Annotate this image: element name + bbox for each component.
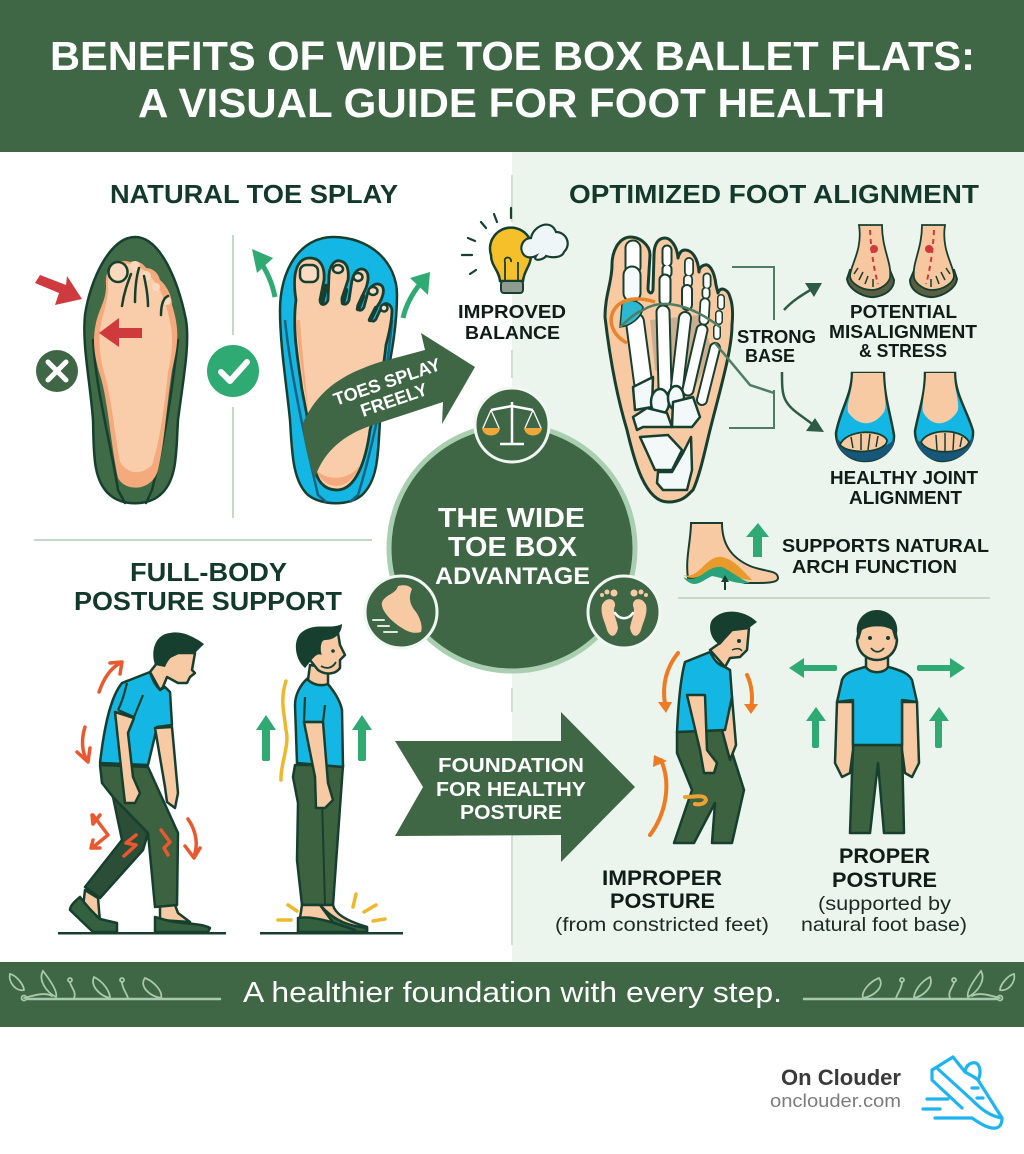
text: strong base: STRONG (737, 326, 816, 347)
text: supports natural arch function: SUPPORTS NATURAL (782, 535, 989, 556)
logo text: On Clouder (781, 1065, 901, 1090)
text: improved balance: BALANCE (465, 322, 560, 343)
icon: happy feet (588, 576, 660, 648)
figure: upright side posture (260, 624, 403, 934)
logo text: onclouder.com (770, 1091, 901, 1111)
arrow: toes splay freely: TOES SPLAY (331, 354, 443, 410)
icon: logo running shoe (923, 1057, 1002, 1128)
text: proper posture: POSTURE (832, 869, 937, 892)
text: strong base: BASE (745, 345, 795, 366)
footer banner: A healthier foundation with every step. (243, 977, 782, 1009)
text: the wide toe box advantage: TOE BOX (448, 531, 577, 562)
text: the wide toe box advantage (435, 502, 590, 590)
text: potential misalignment: MISALIGNMENT (829, 321, 978, 342)
arrow: to healthy alignment (782, 372, 824, 432)
footer banner (0, 962, 1024, 1027)
logo text (770, 1065, 901, 1111)
icon: healthy feet in wide shoes (836, 373, 973, 461)
text: the wide toe box advantage: THE WIDE (438, 502, 585, 533)
text: proper posture: (supported by (818, 893, 951, 915)
icon: green posture arrows (789, 658, 965, 748)
icon: green up arrow (746, 523, 769, 557)
arrow: foundation for healthy posture (395, 712, 635, 862)
heading: optimized foot alignment: OPTIMIZED FOOT ALIGNMENT (569, 179, 979, 209)
figure: proper posture (835, 610, 919, 833)
icon: green up arrows (256, 715, 372, 761)
heading: full-body posture support: FULL-BODY (130, 557, 287, 587)
figure: improper posture (674, 612, 757, 843)
text: supports natural arch function (782, 535, 989, 577)
title: BENEFITS OF WIDE TOE BOX BALLET FLATS: (50, 33, 975, 79)
icon: orange strain arrows (650, 653, 752, 835)
header banner (0, 0, 1024, 152)
icon: yellow spine and sparkles (278, 681, 385, 921)
text: potential misalignment (829, 301, 978, 361)
foot skeleton diagram (605, 237, 774, 502)
text: potential misalignment: & STRESS (859, 340, 947, 361)
icon: arch support foot (683, 523, 778, 590)
text: proper posture (801, 845, 967, 936)
icon: cross (36, 350, 78, 392)
icon: check (207, 345, 259, 397)
heading: natural toe splay: NATURAL TOE SPLAY (110, 179, 398, 209)
icon: light bulb and cloud (458, 208, 568, 343)
text: improper posture: POSTURE (610, 890, 715, 913)
icon: orange arrow heads (653, 702, 758, 767)
icon: right leaf sprig (804, 971, 1014, 1000)
text: improved balance (458, 301, 566, 343)
arrow: to misalignment (784, 283, 822, 310)
text: proper posture: natural foot base) (801, 914, 967, 936)
text: proper posture: PROPER (839, 845, 930, 868)
arrow: toes splay freely: FREELY (358, 379, 430, 421)
icon: strain arrows (77, 662, 200, 858)
text: improper posture (555, 867, 769, 936)
icon: green splay arrows (252, 249, 430, 318)
bracket (729, 267, 774, 428)
figure: stooped side posture (58, 632, 226, 934)
center medallion (389, 425, 635, 671)
icon: balance scales (475, 388, 549, 462)
title: A VISUAL GUIDE FOR FOOT HEALTH (138, 80, 885, 126)
icon: foot stepping (365, 576, 437, 648)
text: potential misalignment: POTENTIAL (850, 301, 957, 322)
text: the wide toe box advantage: ADVANTAGE (435, 563, 590, 590)
text: improved balance: IMPROVED (458, 301, 566, 322)
right panel background (512, 152, 1024, 962)
title (50, 33, 975, 126)
arrow: foundation for healthy posture: POSTURE (460, 802, 562, 824)
constricted foot in narrow shoe (84, 237, 187, 503)
foot splaying in wide shoe (280, 237, 397, 503)
text: healthy joint alignment: ALIGNMENT (849, 487, 963, 508)
arrow: foundation for healthy posture: FOR HEALTHY (436, 779, 587, 801)
heading: full-body posture support (74, 557, 342, 616)
text: improper posture: IMPROPER (602, 867, 722, 890)
icon: left leaf sprig (10, 971, 220, 1000)
arrow: foundation for healthy posture: FOUNDATION (438, 755, 584, 777)
text: improper posture: (from constricted feet) (555, 914, 769, 936)
text: supports natural arch function: ARCH FUNCTION (792, 556, 957, 577)
icon: red squeeze arrows (35, 275, 142, 347)
text: healthy joint alignment: HEALTHY JOINT (830, 467, 979, 488)
arrow: toes splay freely (303, 333, 475, 478)
text: healthy joint alignment (830, 467, 979, 508)
icon: misaligned feet (847, 225, 957, 297)
heading: full-body posture support: POSTURE SUPPORT (74, 586, 342, 616)
text: strong base (737, 326, 816, 366)
